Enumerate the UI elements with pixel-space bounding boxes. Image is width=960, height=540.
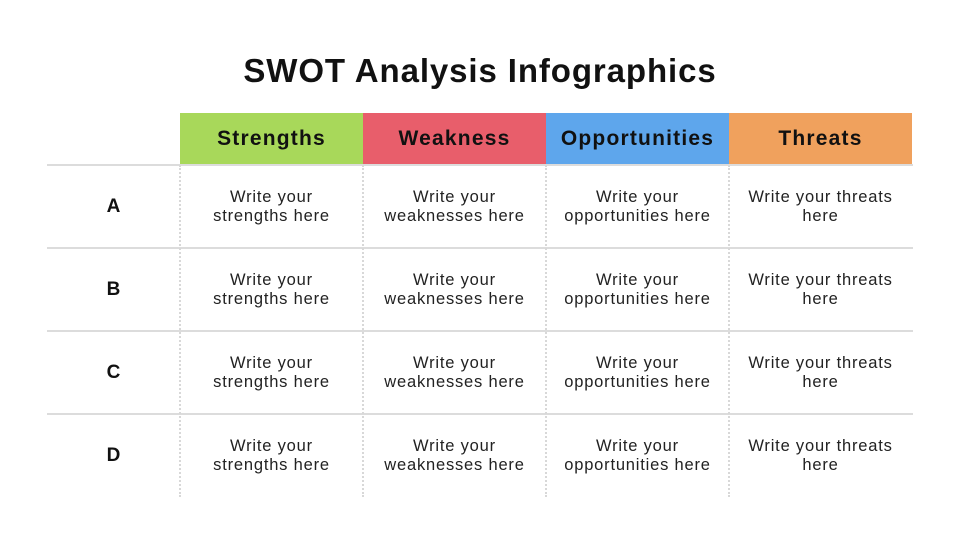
label B: B	[107, 278, 120, 300]
cell A threats: here	[802, 206, 839, 224]
cell B opportunities: Write your	[596, 270, 679, 288]
cell C threats: here	[802, 372, 839, 390]
cell D opportunities: opportunities here	[564, 456, 711, 474]
label A: A	[107, 196, 120, 216]
cell D strengths	[213, 436, 330, 474]
cell A opportunities	[564, 188, 711, 224]
cell B strengths: strengths here	[213, 290, 330, 308]
row A	[107, 188, 893, 224]
cell A threats: Write your threats	[748, 188, 893, 206]
cell D weakness	[384, 436, 525, 474]
header: Opportunities: Opportunities	[561, 126, 714, 150]
cell C weakness	[384, 354, 525, 390]
cell B weakness: Write your	[413, 270, 496, 288]
header: Weakness: Weakness	[399, 126, 510, 150]
label D: D	[107, 444, 120, 466]
row D	[107, 436, 893, 474]
cell A weakness: Write your	[413, 188, 496, 206]
cell A opportunities: Write your	[596, 188, 679, 206]
cell C strengths: strengths here	[213, 372, 330, 390]
cell A opportunities: opportunities here	[564, 206, 711, 224]
label C: C	[107, 362, 120, 382]
cell B opportunities: opportunities here	[564, 290, 711, 308]
title: SWOT Analysis Infographics	[243, 52, 717, 89]
cell B threats: Write your threats	[748, 270, 893, 288]
cell D opportunities: Write your	[596, 436, 679, 454]
cell D strengths: strengths here	[213, 456, 330, 474]
cell A strengths: Write your	[230, 188, 313, 206]
cell D threats	[748, 436, 893, 474]
cell A threats	[748, 188, 893, 224]
cell C weakness: weaknesses here	[384, 372, 525, 390]
cell C opportunities: Write your	[596, 354, 679, 372]
cell D opportunities	[564, 436, 711, 474]
cell B threats: here	[802, 290, 839, 308]
header: Weakness	[363, 113, 546, 164]
row C	[107, 354, 893, 390]
cell A weakness: weaknesses here	[384, 206, 525, 224]
row B	[107, 270, 893, 308]
cell B strengths	[213, 270, 330, 308]
cell D threats: here	[802, 456, 839, 474]
cell B threats	[748, 270, 893, 308]
cell D threats: Write your threats	[748, 436, 893, 454]
cell B weakness: weaknesses here	[384, 290, 525, 308]
header: Strengths	[180, 113, 363, 164]
cell D weakness: Write your	[413, 436, 496, 454]
cell C opportunities	[564, 354, 711, 390]
header: Strengths: Strengths	[217, 126, 326, 150]
cell C strengths: Write your	[230, 354, 313, 372]
cell C opportunities: opportunities here	[564, 372, 711, 390]
cell A weakness	[384, 188, 525, 224]
cell D strengths: Write your	[230, 436, 313, 454]
cell B strengths: Write your	[230, 270, 313, 288]
header: Threats: Threats	[778, 126, 863, 150]
cell C threats	[748, 354, 893, 390]
header: Opportunities	[546, 113, 729, 164]
cell C threats: Write your threats	[748, 354, 893, 372]
cell C weakness: Write your	[413, 354, 496, 372]
header: Threats	[729, 113, 912, 164]
cell C strengths	[213, 354, 330, 390]
cell D weakness: weaknesses here	[384, 456, 525, 474]
cell A strengths	[213, 188, 330, 224]
cell A strengths: strengths here	[213, 206, 330, 224]
cell B weakness	[384, 270, 525, 308]
cell B opportunities	[564, 270, 711, 308]
